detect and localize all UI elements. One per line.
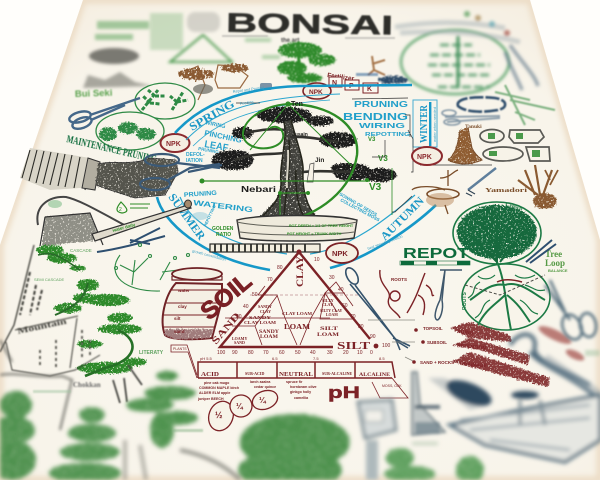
hand: [96, 158, 178, 198]
spring tasks: WIRING: [205, 120, 226, 130]
triangle labels: CLAY LOAM: [244, 320, 277, 325]
right root circle: ROOTS: [462, 292, 468, 310]
small right and left captions: growth consolidation: [192, 249, 226, 262]
title: the art: [281, 38, 299, 44]
scale numbers: 40: [310, 350, 316, 356]
dark pad: [511, 391, 539, 399]
summer tasks: PRUNING: [184, 190, 217, 199]
scale numbers: 90: [232, 350, 238, 356]
pH scale: NEUTRAL: [279, 371, 314, 378]
winter panel: WINTER: [418, 104, 430, 143]
tree lower centre: [126, 371, 198, 448]
ruler under pot: [210, 244, 320, 252]
soil strata: DRAINAGE: [460, 361, 488, 369]
heading: maintenance pruning: MAINTENANCE PRUNING: [65, 134, 158, 166]
water drop icon: [117, 202, 150, 213]
triangle labels: [210, 256, 370, 352]
pH scale: [171, 345, 408, 398]
soil jar: [163, 268, 222, 339]
pH plant list: spruce fir: [286, 380, 303, 384]
scale numbers: 100: [382, 343, 391, 349]
trunk: [258, 120, 318, 218]
season headings: [166, 98, 427, 243]
triangle labels: SILTY: [322, 298, 334, 303]
rock bottom and chokkan label: [0, 340, 72, 430]
scissors in hand: [140, 154, 222, 190]
fertilizer NPK boxes: Fertilizer: [327, 72, 355, 83]
hand holding scissors: [20, 148, 222, 198]
top left blurred panel: styles and triangle: [83, 12, 280, 88]
repot heading: REPOT: [403, 245, 469, 262]
yamadori: [412, 168, 527, 214]
label: Bui Seki: Bui Seki: [75, 88, 113, 100]
spring tasks: [186, 120, 243, 164]
spring tasks: LEAF: [203, 139, 229, 154]
scissors grey: [445, 116, 500, 122]
scale numbers: 50: [252, 292, 258, 298]
blue tool streaks: [505, 45, 538, 90]
right root circle: [462, 262, 550, 330]
pH scale: ACID: [201, 371, 219, 378]
heading: pH: pH: [328, 383, 360, 402]
spring tasks: IATION: [186, 158, 203, 164]
triangle labels: SAND: [234, 340, 245, 345]
repot heading: [400, 245, 470, 265]
tanuki driftwood: [448, 124, 482, 164]
NPK stamp left: [160, 134, 190, 152]
triangle labels: CLAY LOAM: [282, 311, 313, 316]
title: BONSAI: [226, 8, 393, 41]
scale numbers: 30: [327, 350, 333, 356]
NPK stamp top: [303, 83, 331, 99]
green label: water daily: [111, 222, 136, 233]
scale numbers: 100: [217, 350, 226, 356]
heading: soil: SOIL: [196, 268, 257, 326]
triangle labels: LOAMY: [232, 336, 247, 341]
semi cascade tree: [54, 279, 130, 315]
triangle labels: CLAY: [260, 309, 271, 314]
fertilizer NPK boxes: K: [367, 86, 372, 93]
triangle labels: CLAY: [296, 256, 306, 287]
pH plant list: ALDER ELM apple: [199, 391, 230, 395]
hook tool: [435, 270, 462, 320]
spring tasks: DEFOL-: [186, 152, 205, 158]
yamadori root tree: [518, 165, 558, 209]
bonsai pot shapes: [480, 130, 550, 161]
scale numbers: 30: [236, 314, 242, 320]
blurred red soil at right: [537, 323, 600, 363]
topsoil strata: [450, 322, 512, 342]
blurred captions: [33, 390, 203, 432]
fertilizer NPK boxes: N: [332, 80, 337, 87]
pH plant list: cedar quince: [254, 385, 276, 389]
pH plant list: pine oak mugo: [204, 381, 230, 385]
autumn: AUTUMN: [379, 195, 427, 243]
ring arc: summer bottom: [157, 197, 270, 270]
small right and left captions: best sprouting season: [367, 234, 403, 251]
grey streaks: [395, 23, 520, 42]
tree part labels: Ten: [291, 101, 303, 108]
label: tree loop: BALANCE: [548, 268, 568, 273]
top centre brown tree drawings: [178, 64, 272, 100]
tree lower left two: [49, 407, 121, 480]
scale numbers: 60: [342, 303, 348, 309]
dots: [200, 101, 369, 241]
NPK stamp right: NPK: [417, 154, 432, 161]
triangle labels: SANDY: [258, 304, 272, 309]
right big tree crown: [453, 202, 541, 265]
spring tasks: PRUNING: [198, 146, 220, 155]
ring arc: spring top: [175, 85, 412, 133]
small right and left captions: Repot and Pruning: [233, 86, 265, 94]
blurred grey label: [412, 442, 438, 445]
winter and autumn side tasks: [338, 99, 410, 222]
tree part labels: Nebari: [241, 184, 276, 194]
summer tasks: [184, 190, 254, 227]
soil layer labels: SUBSOIL: [427, 340, 447, 345]
soil layer labels: SAND + ROCKS: [420, 360, 454, 365]
scale numbers: 60: [279, 350, 285, 356]
mountain rock: [0, 245, 100, 376]
brown roots and blue mound: [356, 56, 408, 84]
scale numbers: 80: [248, 350, 254, 356]
summer tasks: REPOTTING: [202, 204, 217, 227]
half: ½: [215, 410, 223, 420]
pH plant list: juniper BEECH: [197, 397, 224, 401]
triangle labels: SANDY: [249, 315, 272, 320]
top right blurred circle with pine: [395, 11, 538, 94]
triangle labels: LOAM: [317, 332, 340, 338]
winter and autumn side tasks: COLLECTING MOSS: [340, 197, 381, 222]
tree part labels: Jusain: [292, 132, 308, 138]
grey blurred label block: [187, 12, 220, 32]
winter and autumn side tasks: PRUNING: [354, 99, 409, 109]
one third labels: RATIO: [216, 232, 231, 238]
cascade tree: [34, 245, 92, 282]
pH scale: PLANTS: [173, 347, 187, 351]
foliage: [212, 107, 397, 182]
triangle inner lines: [225, 282, 355, 345]
soil jar: water: [177, 288, 190, 293]
pH plant list: ginkgo holly: [290, 390, 311, 394]
scale numbers: 30: [329, 275, 335, 281]
pH scale: MOSS, OAK: [382, 384, 402, 388]
soil strata: RETENTION: [457, 343, 487, 352]
bonsai pot: POT DEPTH = 1/3 OF TREE HEIGHT: [289, 224, 354, 228]
grey guide strokes: [113, 365, 142, 403]
branches: [235, 129, 355, 172]
pH scale: 7.5: [313, 356, 319, 361]
tree lower left: [0, 391, 36, 480]
one third labels: V3: [369, 182, 382, 193]
soil jar: clay: [178, 304, 187, 309]
triangle labels: CLAY: [322, 302, 333, 307]
pH scale: SUB-ALCALINE: [322, 371, 353, 376]
root sketches: [380, 270, 434, 318]
triangle labels: SAND: [210, 311, 243, 347]
spring tasks: PINCHING: [204, 128, 243, 145]
pH scale: ALCALINE: [359, 372, 390, 378]
rope oval: [458, 97, 505, 112]
seasons ring: [157, 85, 436, 270]
winter panel: water when needed: [432, 107, 437, 142]
tree part labels: Jin: [315, 157, 324, 164]
circle: leaves upper: [135, 83, 195, 119]
pine at right edge: [495, 85, 555, 125]
fertilizer NPK boxes: [327, 72, 378, 93]
sleeve: [20, 148, 100, 190]
scale numbers: 0: [370, 350, 373, 356]
yamadori: Yamadori: [485, 187, 527, 194]
one third labels: V3: [378, 154, 388, 163]
scissors top left: [68, 98, 140, 131]
tool box: [450, 395, 600, 462]
blue wire tool: [526, 240, 556, 263]
soil jar: silt: [174, 316, 181, 321]
soil jar: sand: [174, 329, 185, 334]
repot calendar bar: [400, 261, 470, 265]
scale numbers: 90: [370, 334, 376, 340]
scale numbers: 20: [343, 350, 349, 356]
soil layer labels: [412, 326, 454, 365]
label: tree loop: Tree: [545, 249, 562, 259]
subsoil strata: [452, 338, 530, 365]
NPK stamp right: [412, 147, 442, 165]
winter and autumn side tasks: SOWING OF SEEDS: [338, 192, 378, 217]
scissors lower right: [545, 280, 598, 343]
label: tree loop: [545, 249, 568, 273]
soil strata: [450, 322, 550, 387]
bottle: [412, 372, 445, 435]
triangle labels: LOAM: [326, 313, 338, 317]
scale numbers: 80: [277, 265, 283, 271]
blurred green headings: [95, 13, 183, 50]
soil strata: AGING: [457, 329, 474, 336]
triangle labels: SILT: [337, 341, 370, 352]
top centre green bonsai: [277, 42, 336, 83]
mountain rock: Mountain: [16, 316, 68, 336]
triangle labels: SANDY: [259, 330, 279, 335]
central bonsai tree: [212, 107, 397, 218]
scale numbers: 70: [350, 314, 356, 320]
title: [222, 8, 395, 44]
soil mix fractions: [205, 387, 280, 434]
winter panel: [413, 100, 437, 147]
scale numbers: 40: [243, 304, 249, 310]
NPK stamp top: NPK: [309, 89, 323, 96]
pH plant list: larch azalea: [250, 380, 271, 384]
blurred soil meter: [358, 400, 396, 480]
NPK stamp left: NPK: [166, 141, 181, 148]
fork tool: [343, 266, 410, 350]
pH scale: pH 5.5: [200, 356, 213, 361]
quarter: ¼: [236, 402, 244, 411]
NPK stamp bottom: [326, 243, 358, 263]
triangle labels: SILT: [320, 326, 338, 332]
tree part labels: [241, 101, 324, 194]
triangle labels: SILTY CLAY: [320, 309, 343, 313]
triangle labels: LOAM: [260, 335, 278, 340]
pH scale: SUB-ACID: [245, 371, 264, 376]
scale numbers: [217, 257, 391, 356]
label: tree loop: Loop: [545, 258, 565, 268]
blurred foreground trees: [0, 371, 484, 480]
drainage strata: [452, 352, 550, 387]
summer: SUMMER: [166, 192, 207, 243]
small blurred trees: [384, 448, 484, 480]
grey mound: [89, 48, 139, 64]
cascade tree: CASCADE: [70, 248, 92, 253]
pH scale: 8.5: [379, 356, 385, 361]
triangle frame: [220, 252, 370, 347]
bonsai pot: [237, 216, 357, 241]
fertilizer NPK boxes: P: [349, 83, 354, 90]
cascade tree: SEMI CASCADE: [34, 277, 65, 282]
soil layer labels: TOPSOIL: [423, 326, 443, 331]
loop handle tool: [510, 334, 600, 400]
scale numbers: 70: [263, 350, 269, 356]
text: Chokkan: [73, 381, 101, 389]
thin guide lines around tree: [236, 98, 492, 212]
small right and left captions: [192, 86, 403, 262]
triangle labels: LOAM: [284, 322, 310, 331]
leaf circles: [96, 83, 195, 150]
jin deadwood: [307, 163, 314, 182]
green triangle diagram: [170, 35, 232, 62]
scale numbers: 10: [314, 257, 320, 263]
one third labels: V3: [368, 137, 376, 143]
scale numbers: 40: [338, 287, 344, 293]
spout: [92, 205, 191, 241]
winter and autumn side tasks: BENDING: [343, 112, 408, 123]
water drop icon: 2: [119, 207, 122, 213]
pH plant list: camellia: [294, 396, 309, 400]
soil texture triangle: [210, 250, 391, 356]
pH plant list: COMMON MAPLE birch: [199, 386, 239, 390]
coloured swatches: [464, 11, 510, 36]
blurred repotting tools: [428, 334, 600, 462]
winter and autumn side tasks: REPOTTING: [365, 132, 410, 138]
branch sketch circle: [114, 244, 190, 291]
scale numbers: 80: [358, 324, 364, 330]
root labels: ROOTS: [391, 277, 407, 282]
soil layer lines: [368, 320, 415, 362]
quarter two: ¼: [259, 396, 267, 405]
tree bottom large: [238, 414, 350, 480]
literati tree: LITERATY: [139, 350, 164, 356]
pH scale: 6.5: [272, 356, 278, 361]
one third labels: [212, 137, 388, 238]
grey rock drawing: [83, 72, 153, 88]
scale numbers: 10: [357, 350, 363, 356]
small right and left captions: Feeding: [240, 100, 254, 106]
scale numbers: 50: [295, 350, 301, 356]
golden ratio spiral: [200, 101, 392, 241]
tanuki driftwood: Tanuki: [465, 124, 482, 130]
winter tools and wire: [442, 97, 505, 125]
label: crown: Crown: [504, 202, 524, 213]
spring: SPRING: [188, 98, 237, 134]
summer tasks: WATERING: [193, 198, 254, 214]
watering can: [37, 197, 192, 246]
one third labels: GOLDEN: [212, 226, 234, 232]
ring arc: autumn: [330, 205, 436, 268]
NPK stamp bottom: NPK: [332, 249, 348, 258]
bud tool blue: [97, 228, 165, 252]
scale numbers: 70: [267, 277, 273, 283]
brush: [428, 378, 488, 410]
winter and autumn side tasks: WIRING: [359, 121, 405, 130]
pH plant list: hornbeam olive: [290, 385, 317, 389]
literati tree: [77, 313, 164, 376]
bonsai pot: POT HEIGHT = TRUNK WIDTH: [287, 232, 342, 236]
tree base centre: [125, 440, 146, 480]
circle: leaves lower: [96, 112, 164, 150]
pH plant list: [197, 380, 317, 401]
